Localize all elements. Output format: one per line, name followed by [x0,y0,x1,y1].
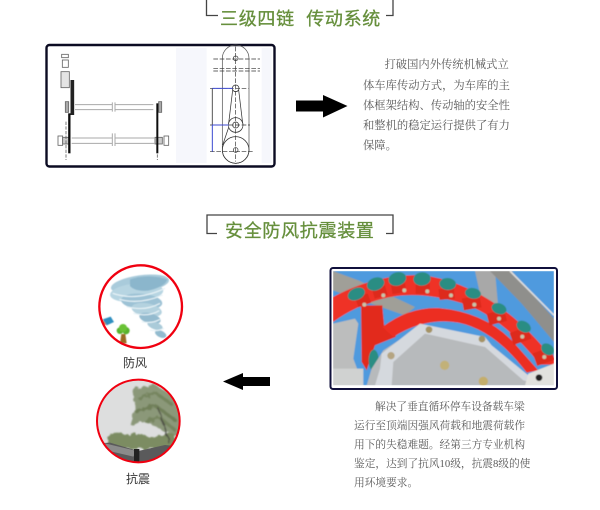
shafts [72,102,155,146]
arrow: right [296,95,348,118]
heading bracket: wind and seismic device [206,214,394,234]
motor and chains [58,54,169,160]
text block: wind and seismic description: 解决了垂直循环停车设备载车梁 [375,401,525,413]
text block: transmission description: 和整机的稳定运行提供了有力 [363,120,510,132]
panel: red guide rail photo [330,267,558,390]
bolts [387,352,395,359]
text block: wind and seismic description: 鉴定，达到了抗风10级，抗震8级的使 [354,458,530,470]
panel: transmission diagram [45,44,276,168]
text block: transmission description [363,58,510,152]
red rails [333,275,554,365]
rollers [346,270,556,371]
arrow: left [223,373,270,390]
sprocket schematic [210,45,260,163]
text block: transmission description: 体框架结构、传动轴的安全性 [363,100,510,112]
icon: tree photo in red circle [96,378,181,464]
text block: wind and seismic description: 用环境要求。 [354,476,418,488]
icon: tornado in red circle [98,264,184,350]
brackets [355,281,555,366]
text block: wind and seismic description: 用下的失稳难题。经第三方专业机构 [354,439,525,451]
heading: transmission system: 三级四链 传动系统 [220,9,381,29]
heading: wind and seismic device: 安全防风抗震装置 [225,221,375,241]
label: wind protection: 防风 [123,356,147,370]
text block: transmission description: 打破国内外传统机械式立 [384,59,509,71]
text block: transmission description: 体车库传动方式，为车库的主 [363,80,510,92]
text block: transmission description: 保障。 [363,140,397,152]
text block: wind and seismic description [354,400,530,488]
heading bracket: transmission system [206,0,394,16]
beams [333,271,415,315]
grey structure [333,318,359,370]
text block: wind and seismic description: 运行至顶端因强风荷载和地震荷载作 [354,420,525,432]
label: seismic resistance: 抗震 [126,472,150,486]
